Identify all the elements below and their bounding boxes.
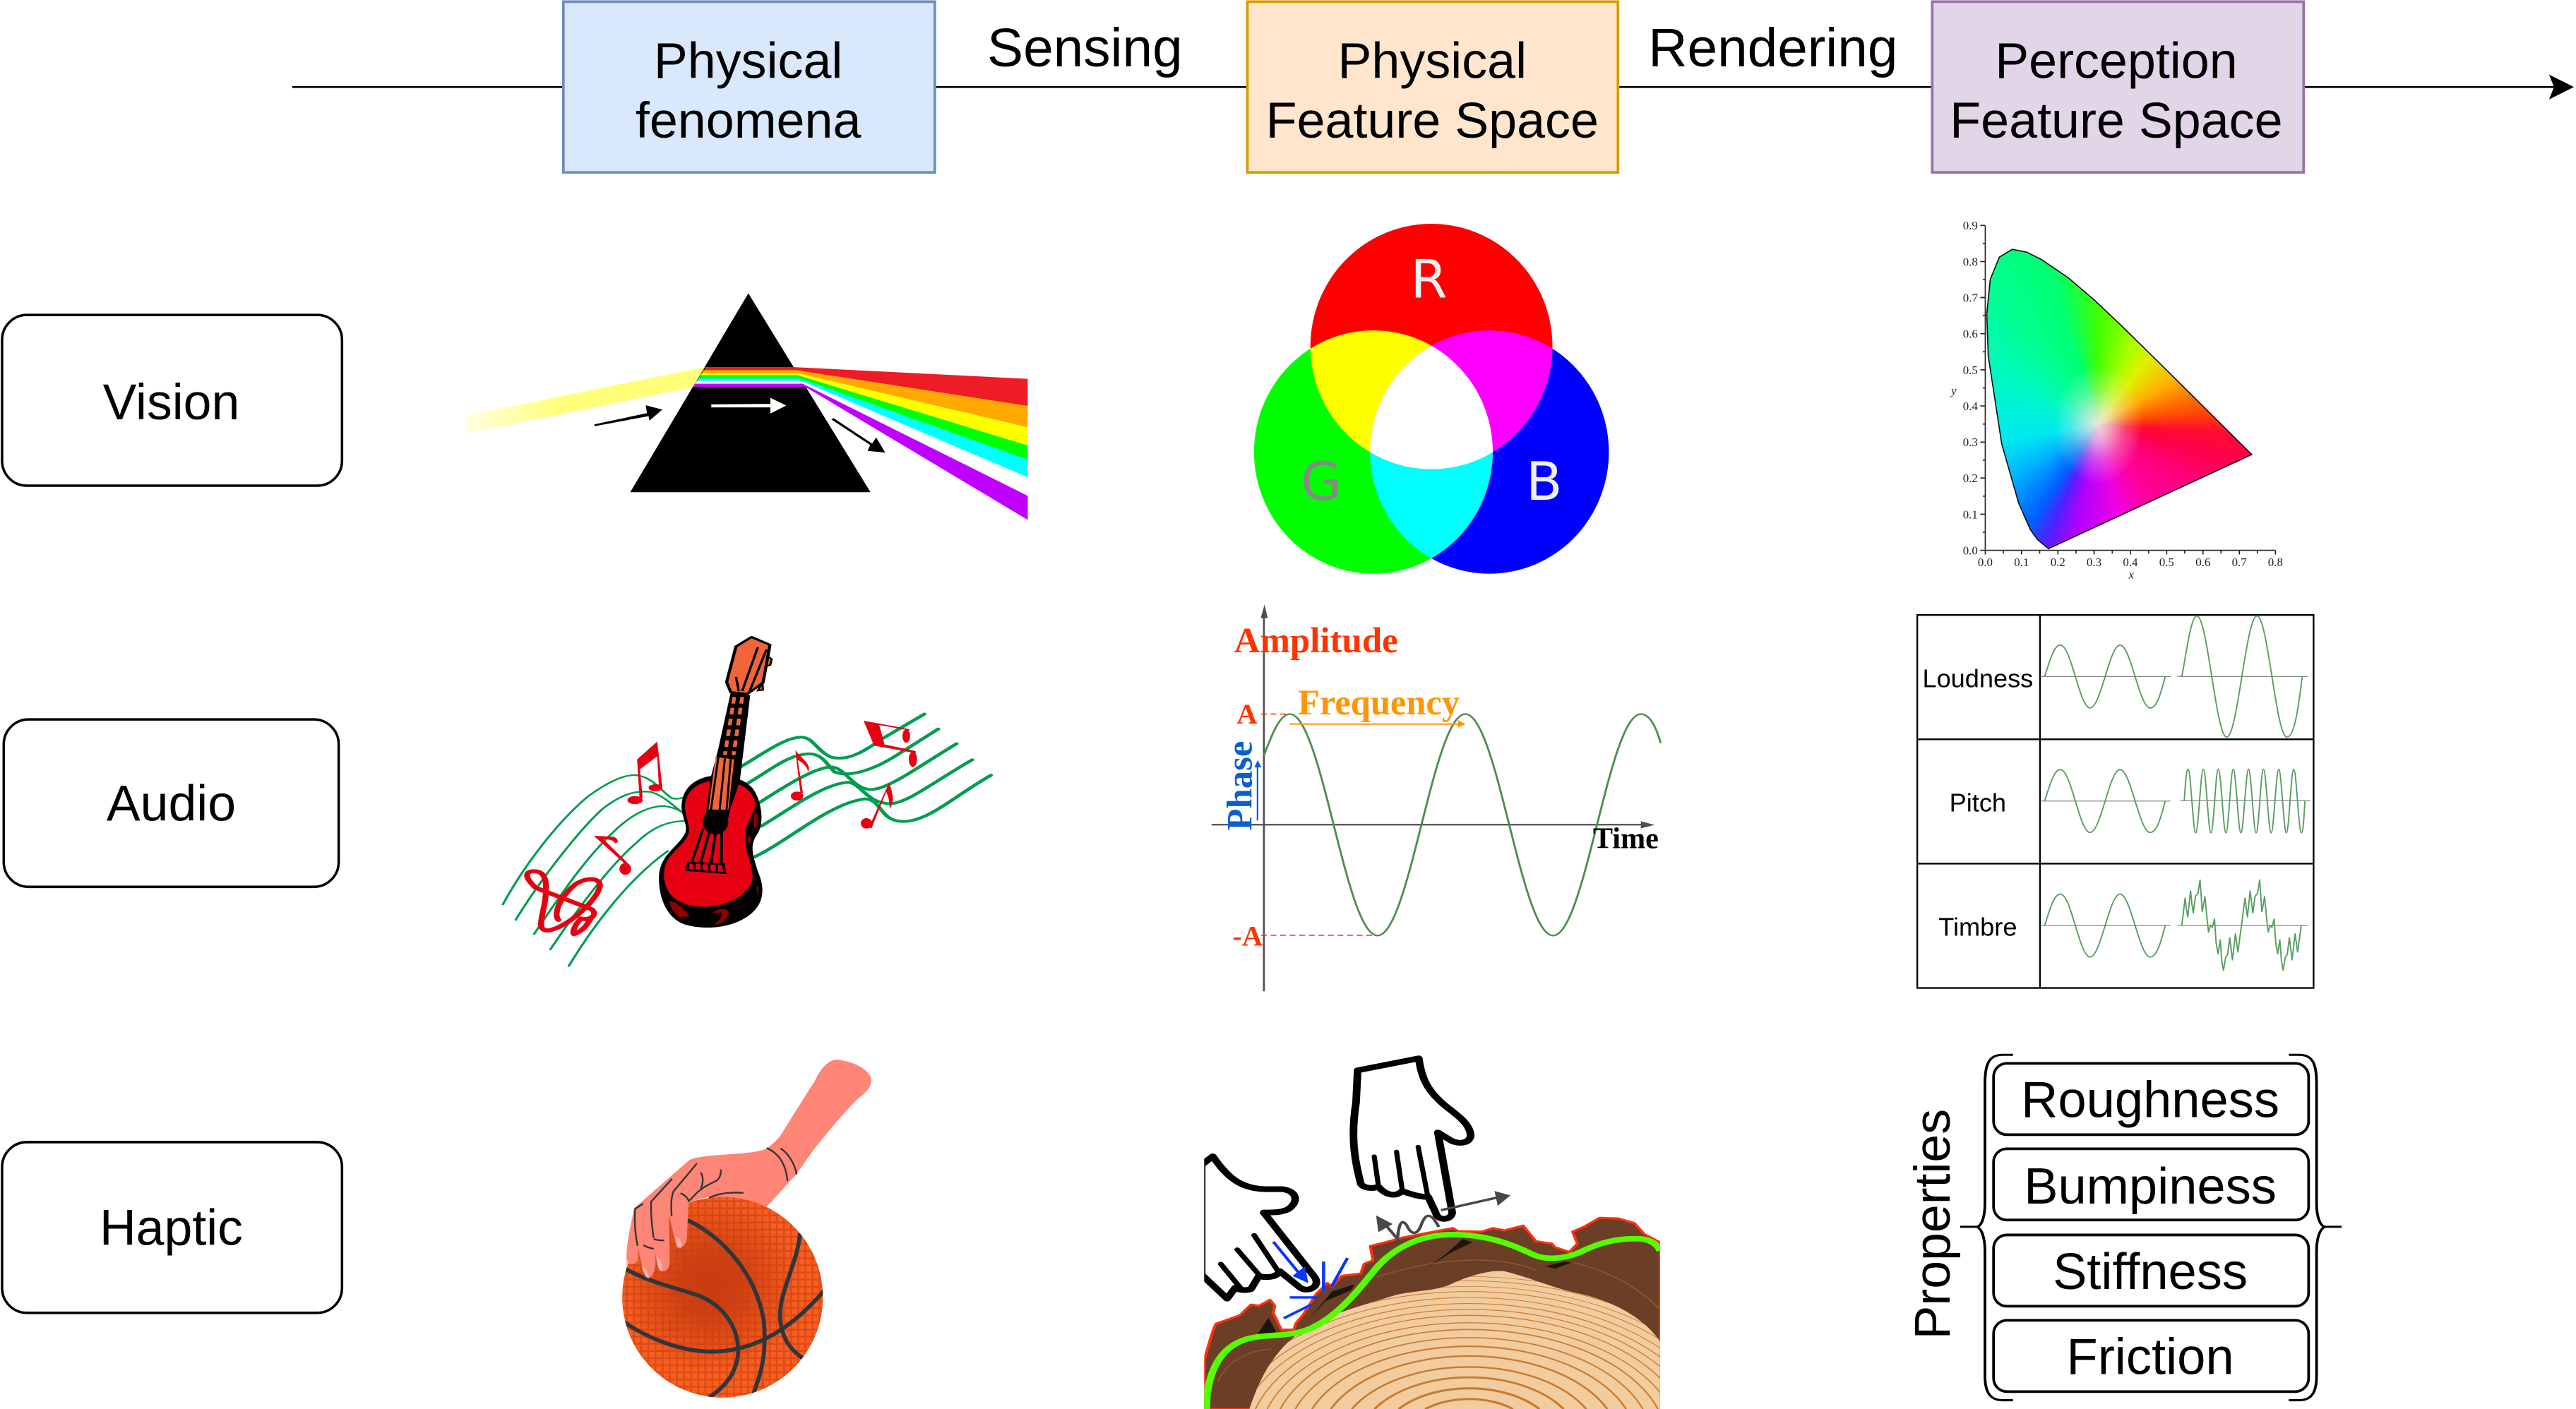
box: perception feature space: Feature Space [1950,92,2283,149]
basketball [622,1197,824,1398]
property: bumpiness: Bumpiness [2024,1158,2277,1215]
box: physical feature space [1247,1,1618,172]
box: physical feature space: Feature Space [1266,92,1599,149]
chart: cie chromaticity diagram: 0.8 [1963,255,1978,268]
box: physical fenomena [564,1,935,172]
row label: haptic [2,1142,342,1313]
sliding arrows [1376,1191,1510,1239]
finger lines [635,1149,797,1249]
chart: cie chromaticity diagram: y [1950,384,1957,397]
guitar headstock [727,637,772,694]
chart: sine wave with amplitude, frequency, phase [1212,604,1661,991]
chart: cie chromaticity diagram: 0.4 [1963,400,1978,413]
chart: cie chromaticity diagram: 0.4 [2123,556,2138,569]
chart: cie chromaticity diagram: 0.8 [2268,556,2283,569]
chart: sine wave with amplitude, frequency, phase: Frequency [1298,683,1460,722]
box: physical feature space: Physical [1338,32,1527,89]
chart: cie chromaticity diagram: 0.2 [2051,556,2065,569]
chart: cie chromaticity diagram: 0.6 [1963,328,1978,341]
heartwood with growth rings [1250,1271,1660,1409]
chart: cie chromaticity diagram: 0.1 [2014,556,2029,569]
chart: cie chromaticity diagram: 0.3 [2087,556,2101,569]
chart: cie chromaticity diagram: 0.1 [1963,508,1978,521]
box: perception feature space [1932,1,2303,172]
box: physical fenomena: fenomena [636,92,861,149]
chart: cie chromaticity diagram: 0.5 [2159,556,2174,569]
chart: cie chromaticity diagram: 0.5 [1963,364,1978,377]
waveforms [2041,616,2310,970]
label: rendering: Rendering [1648,18,1897,78]
bark cross section [1204,1218,1660,1409]
chart: sine wave with amplitude, frequency, phase: Phase [1220,741,1259,830]
fingers [626,1160,722,1278]
row label: haptic: Haptic [100,1200,243,1257]
label: sensing: Sensing [987,18,1183,78]
right hand sliding [1354,1058,1471,1219]
chart: loudness pitch timbre table [1917,615,2313,988]
chart: rgb additive colour circles: G [1301,450,1342,512]
pressing arrow and impact marks [1273,1242,1347,1318]
property: bumpiness [1993,1149,2308,1220]
illustration: wood surface with touching hands [1204,1055,1660,1409]
red treble clef [527,871,600,934]
chart: cie chromaticity diagram: x [2128,568,2134,582]
illustration: prism dispersing light [467,294,1027,520]
chart: cie chromaticity diagram: 0.6 [2195,556,2210,569]
property: roughness [1993,1063,2308,1134]
property: friction [1993,1320,2308,1391]
property: friction: Friction [2067,1329,2234,1386]
chart: cie chromaticity diagram: 0.0 [1978,556,1993,569]
arm and palm [688,1060,871,1207]
red music notes [594,721,917,875]
property: roughness: Roughness [2021,1072,2279,1129]
illustration: guitar with music staff [503,637,991,966]
chart: rgb additive colour circles: B [1526,450,1563,512]
chart: loudness pitch timbre table: Timbre [1938,913,2017,942]
box: physical fenomena: Physical [654,32,842,89]
pipeline arrow [292,75,2574,100]
chart: loudness pitch timbre table: Loudness [1922,664,2033,692]
chart: rgb additive colour circles [1254,224,1609,574]
box: perception feature space: Perception [1995,32,2238,89]
row label: vision: Vision [103,374,239,431]
chart: cie chromaticity diagram: 0.7 [2232,556,2247,569]
music staff lines [503,714,991,966]
chart: cie chromaticity diagram: 0.0 [1963,544,1978,557]
chart: sine wave with amplitude, frequency, phase: Amplitude [1234,621,1398,661]
left hand pressing [1202,1156,1316,1299]
chart: sine wave with amplitude, frequency, phase: Time [1593,822,1659,856]
illustration: hand on basketball [622,1060,871,1398]
property: stiffness: Stiffness [2053,1244,2248,1300]
chart: rgb additive colour circles: R [1410,248,1448,311]
green smoothed surface line [1206,1235,1660,1409]
chart: cie chromaticity diagram: 0.9 [1963,219,1978,232]
chart: cie chromaticity diagram [1950,219,2283,582]
chart: loudness pitch timbre table: Pitch [1950,788,2006,817]
bracket: properties group [1960,1055,2342,1401]
chart: cie chromaticity diagram: 0.7 [1963,291,1978,304]
row label: audio [4,719,339,887]
row label: vision [2,315,342,486]
row label: audio: Audio [107,775,236,832]
chart: cie chromaticity diagram: 0.2 [1963,472,1978,485]
property: stiffness [1993,1235,2308,1306]
chart: sine wave with amplitude, frequency, phase: -A [1232,921,1263,952]
guitar body [659,692,763,928]
chart: sine wave with amplitude, frequency, phase: A [1236,698,1258,730]
chart: cie chromaticity diagram: 0.3 [1963,436,1978,449]
text: properties vertical label: Properties [1904,1109,1961,1339]
